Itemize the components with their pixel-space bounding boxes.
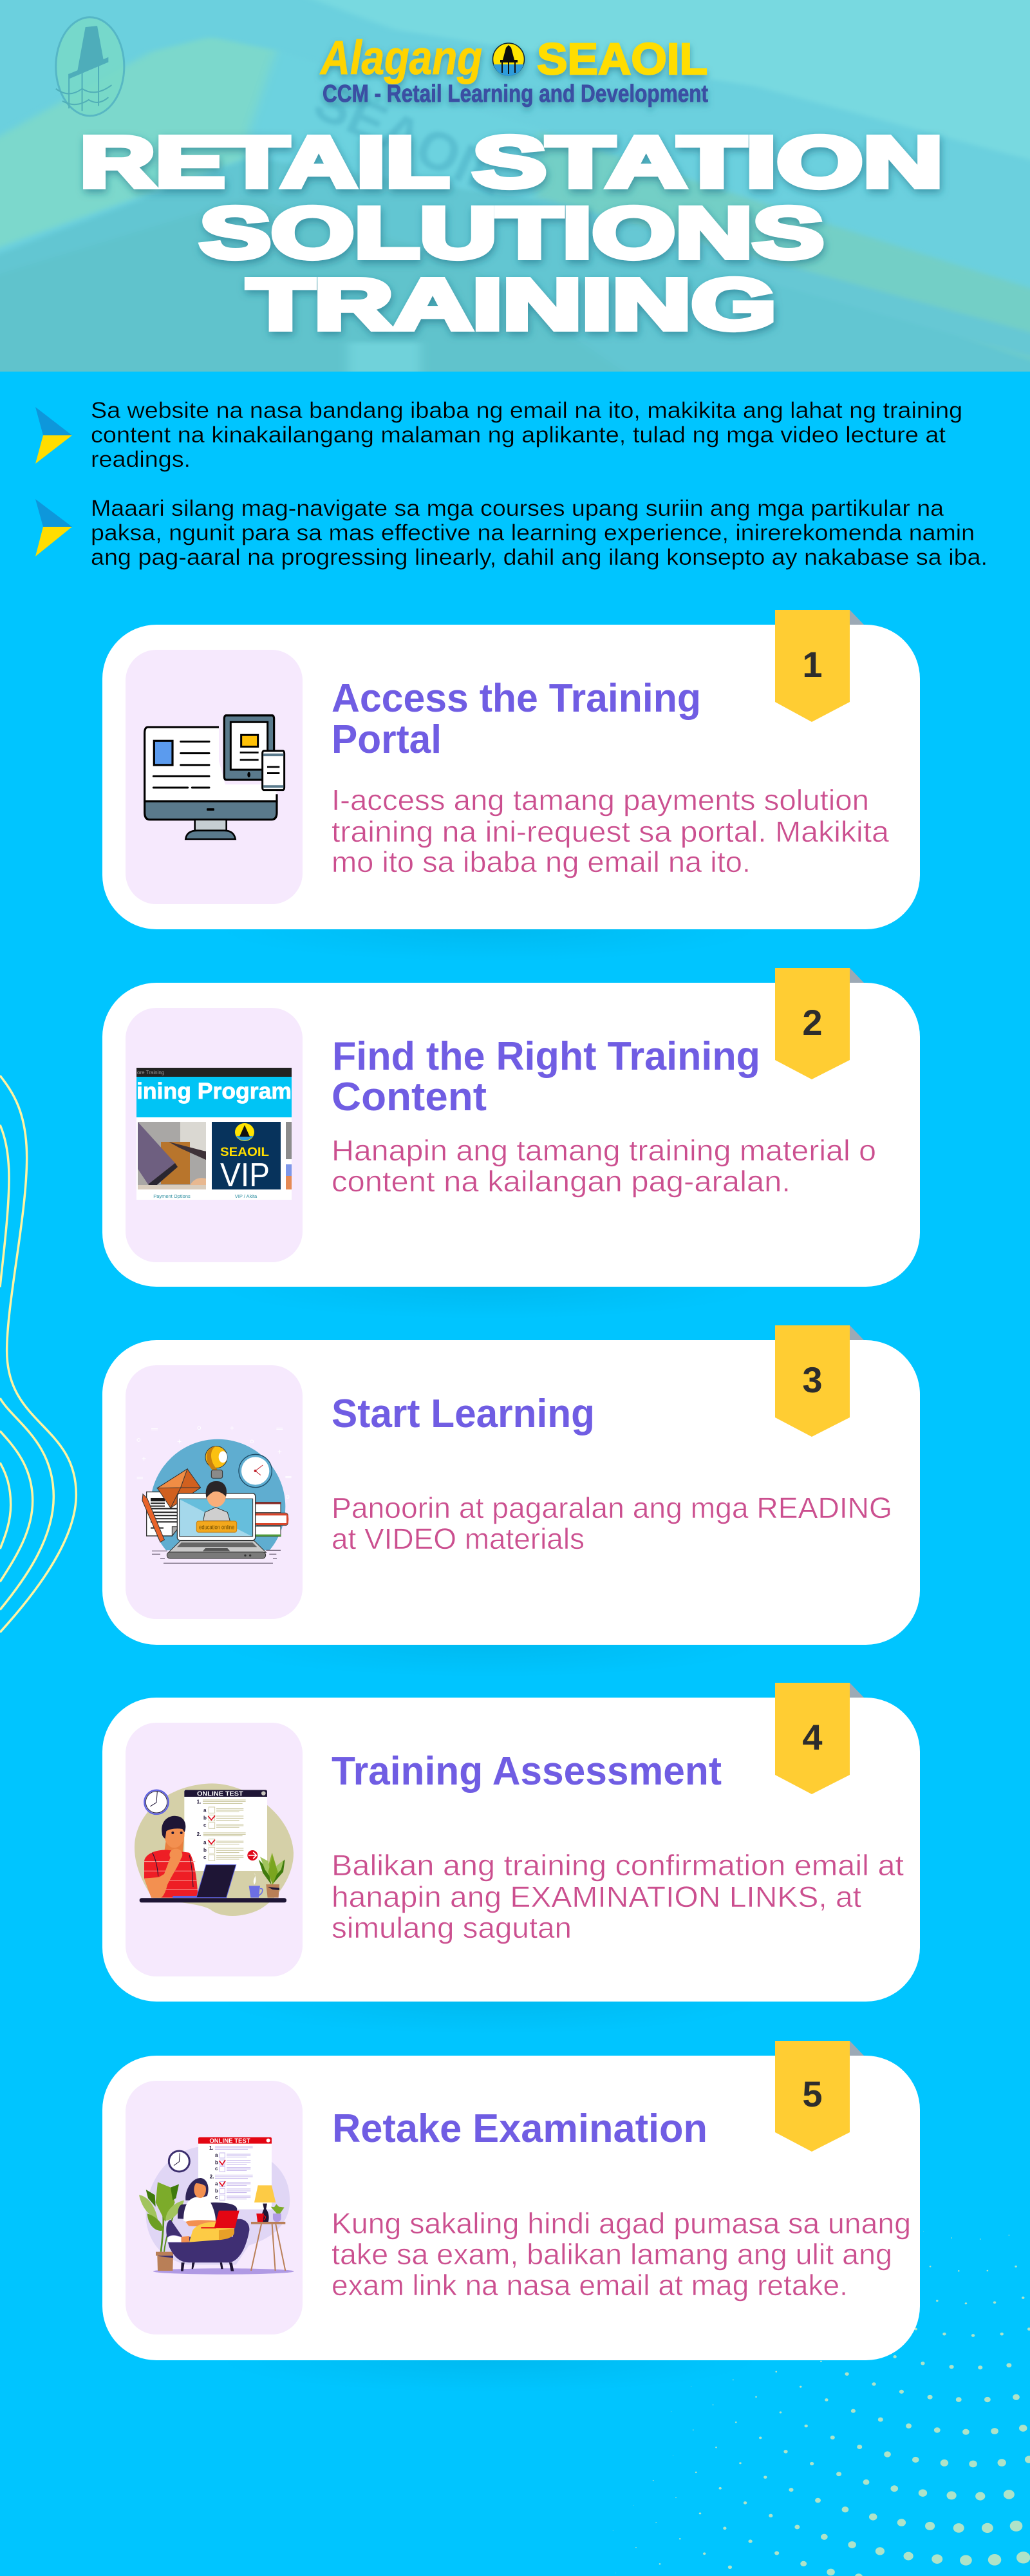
card 4 heading: Training Assessment (332, 1749, 722, 1794)
screenshot: training program page: Payment Options (153, 1193, 191, 1199)
test window: ONLINE TEST (209, 2137, 250, 2145)
card 1 ribbon: 1 (802, 644, 823, 685)
card 3 description: Panoorin at pagaralan ang mga READING (332, 1492, 892, 1524)
card 5 description: exam link na nasa email at mag retake. (332, 2269, 848, 2302)
logo emblem: oil rig (493, 43, 524, 76)
bulb (205, 1446, 227, 1478)
test window: 2. (210, 2174, 214, 2180)
card 2 description: content na kailangan pag-aralan. (332, 1165, 791, 1198)
card 3 ribbon (775, 1325, 864, 1437)
intro text 2: ang pag-aaral na progressing linearly, dahil ang ilang konsepto ay nakabase sa iba. (91, 545, 988, 570)
test window: a (215, 2181, 218, 2186)
test window: c (203, 1855, 207, 1861)
wall clock (169, 2151, 189, 2172)
card 2 heading: Find the Right Training (332, 1034, 760, 1079)
intro text 1 (91, 398, 962, 472)
test window: c (215, 2194, 218, 2200)
laptop and desk (140, 1865, 286, 1902)
card 1 description (332, 784, 890, 878)
logo: Alagang SEAOIL (319, 31, 708, 108)
icon: computer, tablet and phone (145, 715, 285, 839)
intro paragraph 2 with arrow (35, 496, 988, 570)
card 4: Training Assessment (102, 1683, 920, 2002)
test window: ONLINE TEST (197, 1790, 243, 1797)
screenshot: training program page: VIP / Akita (235, 1193, 258, 1199)
screenshot: training program page (136, 1068, 292, 1200)
title: RETAIL (80, 122, 449, 202)
halftone dot pattern (613, 2231, 1030, 2576)
card 2 heading: Content (332, 1075, 487, 1119)
card 2 description: Hanapin ang tamang training material o (332, 1134, 876, 1167)
card 2 ribbon: 2 (802, 1002, 823, 1043)
plant (259, 1853, 285, 1898)
thumbnail: SEAOIL VIP: VIP (220, 1157, 270, 1194)
intro paragraph 1 with arrow (35, 398, 962, 472)
card 1 description: training na ini-request sa portal. Makikita (332, 815, 890, 848)
arrow bullet 1 (35, 407, 72, 464)
card 4 ribbon: 4 (802, 1717, 823, 1757)
test window: b (215, 2188, 218, 2193)
intro text 1: content na kinakailangang malaman ng aplikante, tulad ng mga video lecture at (91, 422, 946, 448)
card 4 description: Balikan ang training confirmation email at (332, 1849, 904, 1882)
card 2: Find the Right Training Content (102, 968, 920, 1287)
wavy line decoration (0, 1075, 76, 1633)
test window: b (203, 1815, 207, 1821)
card 2 ribbon (775, 968, 864, 1079)
card 4 background (102, 1698, 920, 2002)
card 3 heading: Start Learning (332, 1392, 595, 1436)
test window: c (203, 1823, 207, 1828)
card 2 background (102, 983, 920, 1287)
thumbnail: SEAOIL VIP (212, 1122, 281, 1194)
card 1 heading: Portal (332, 717, 442, 762)
card 3 icon panel (126, 1365, 303, 1619)
card 4 description: hanapin ang EXAMINATION LINKS, at (332, 1880, 862, 1913)
logo wordmark Alagang: Alagang (319, 31, 482, 84)
card 1 background (102, 625, 920, 929)
card 3 ribbon: 3 (802, 1359, 823, 1400)
subtitle: CCM - Retail Learning and Development (323, 80, 708, 108)
card 3: Start Learning (102, 1325, 920, 1645)
test window (198, 2137, 272, 2210)
floor (153, 2268, 294, 2275)
clock (239, 1454, 272, 1488)
test window: 1. (197, 1799, 201, 1805)
test window: c (215, 2166, 218, 2172)
card 5 heading: Retake Examination (332, 2107, 707, 2151)
card 4 icon panel (126, 1723, 303, 1976)
card 2 description (332, 1134, 876, 1198)
header banner: tinted station photo (0, 0, 1030, 394)
test window: b (203, 1848, 207, 1853)
test window: a (203, 1839, 207, 1845)
soft card shadows (219, 897, 760, 2392)
intro text 2: paksa, ngunit para sa mas effective na learning experience, inirerekomenda namin (91, 520, 975, 545)
man (144, 1816, 198, 1898)
card 5 ribbon (775, 2041, 864, 2152)
title (80, 122, 943, 345)
thumbnail: SEAOIL VIP: SEAOIL (220, 1146, 269, 1159)
card 1 description: mo ito sa ibaba ng email na ito. (332, 846, 751, 878)
test window: 1. (209, 2145, 214, 2151)
card 5 description (332, 2207, 911, 2302)
illustration: man taking online test (135, 1783, 294, 1916)
test window: a (215, 2152, 218, 2158)
title: TRAINING (247, 264, 776, 345)
logo wordmark SEAOIL: SEAOIL (537, 34, 707, 84)
laptop: education online (199, 1524, 234, 1530)
illustration: online education laptop (137, 1426, 292, 1563)
lamp and side table (251, 2185, 285, 2271)
title: SOLUTIONS (200, 193, 824, 273)
potted plant (139, 2182, 184, 2271)
screenshot: training program page: ining Program (136, 1079, 292, 1104)
woman (167, 2178, 239, 2242)
card 2 icon panel (126, 1008, 303, 1262)
thumbnail: payment options photo (138, 1122, 206, 1189)
faded station sign lettering: SEAOIL (306, 70, 514, 207)
wall clock (144, 1790, 169, 1814)
intro text 2: Maaari silang mag-navigate sa mga courses upang suriin ang mga partikular na (91, 496, 944, 521)
card 1 ribbon (775, 610, 864, 722)
armchair (166, 2202, 249, 2271)
test window (184, 1790, 267, 1871)
card 4 ribbon (775, 1683, 864, 1794)
card 1 heading (332, 676, 701, 762)
intro text 1: Sa website na nasa bandang ibaba ng email na ito, makikita ang lahat ng training (91, 398, 962, 423)
envelope (157, 1469, 201, 1508)
card 1 icon panel (126, 650, 303, 904)
screenshot: training program page: ore Training (137, 1070, 164, 1075)
coffee cup (249, 1873, 263, 1898)
intro text 2 (91, 496, 988, 570)
card 3 description (332, 1492, 892, 1555)
card 4 description: simulang sagutan (332, 1911, 572, 1944)
card 5 icon panel (126, 2081, 303, 2334)
card 2 heading (332, 1034, 760, 1119)
test window: a (203, 1807, 207, 1813)
document and pencil (142, 1492, 179, 1542)
card 1 heading: Access the Training (332, 676, 701, 721)
card 1: Access the Training Portal (102, 610, 920, 929)
test window: 2. (197, 1832, 201, 1837)
card 5 background (102, 2056, 920, 2360)
card 5 description: Kung sakaling hindi agad pumasa sa unang (332, 2207, 911, 2240)
card 5 ribbon: 5 (802, 2074, 823, 2114)
books (256, 1502, 288, 1537)
card 3 background (102, 1340, 920, 1645)
laptop (167, 1481, 266, 1558)
card 3 description: at VIDEO materials (332, 1522, 585, 1555)
illustration: woman retaking online test on armchair (139, 2137, 294, 2275)
card 1 description: I-access ang tamang payments solution (332, 784, 869, 817)
card 5 description: take sa exam, balikan lamang ang ulit ang (332, 2238, 892, 2271)
intro text 1: readings. (91, 447, 191, 472)
card 5: Retake Examination (102, 2041, 920, 2360)
arrow bullet 2 (35, 499, 72, 556)
title: STATION (473, 122, 943, 202)
faded oval station sign (56, 17, 124, 116)
test window: b (215, 2159, 218, 2165)
card 4 description (332, 1849, 904, 1944)
